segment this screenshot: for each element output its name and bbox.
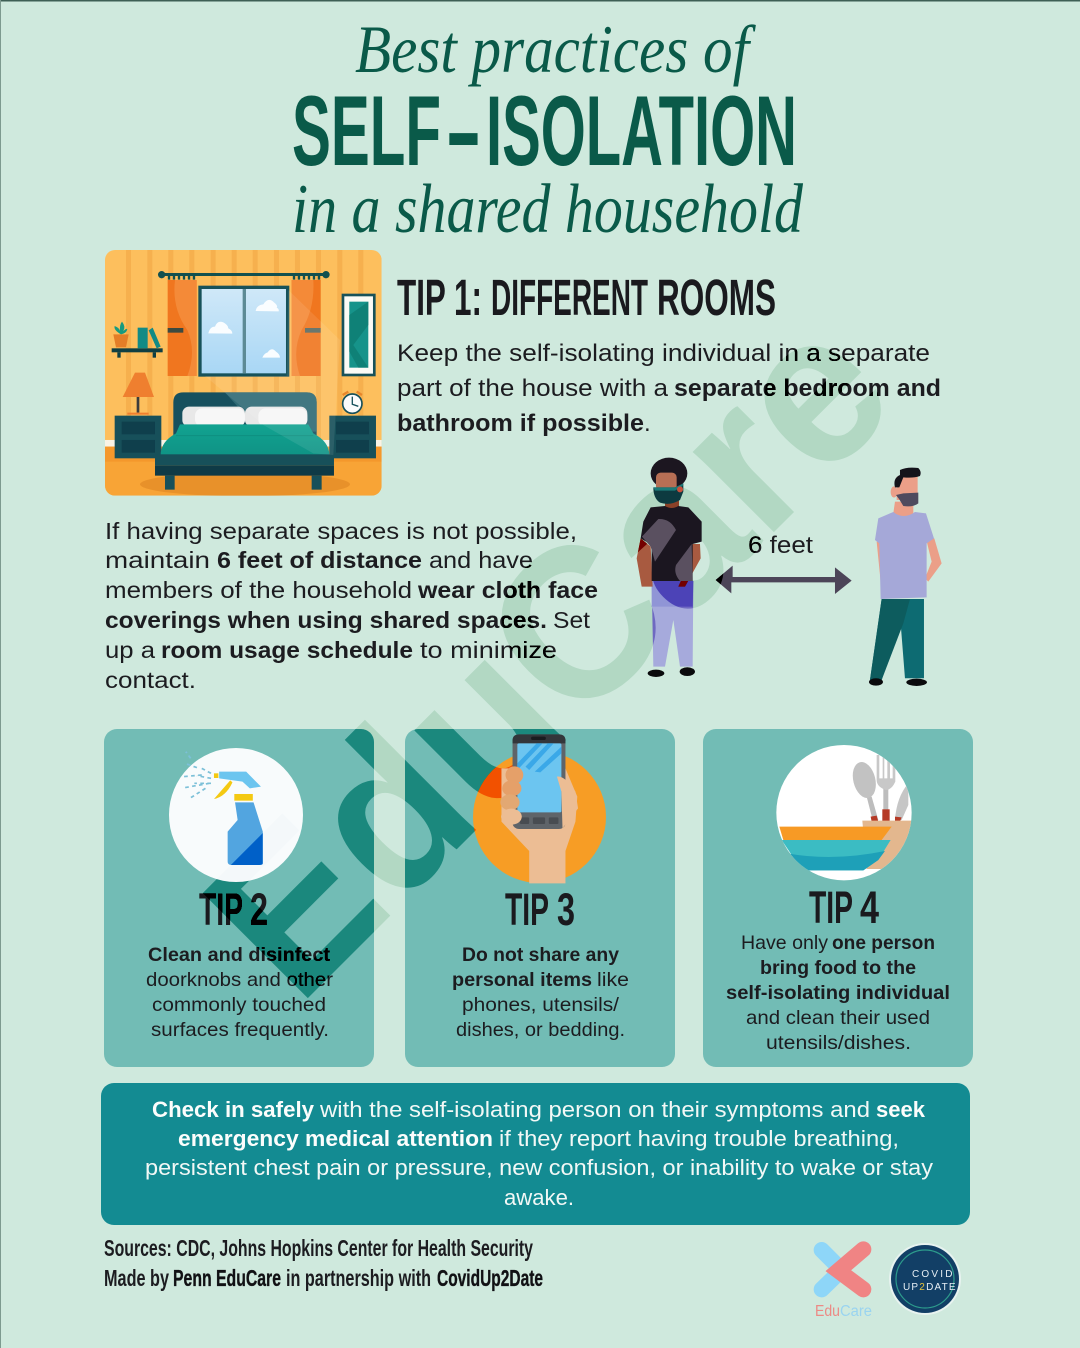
- lamp: [123, 373, 154, 397]
- title line: self-isolation: -: [445, 75, 482, 186]
- sources and credits: CovidUp2Date: [437, 1265, 543, 1291]
- text block: distance advice: coverings when using shared spaces.: [105, 607, 547, 633]
- icon: hand holding phone: [500, 734, 578, 883]
- label: 6 feet: 6 feet: [748, 532, 813, 559]
- heading: tip 1: TIP 1:: [397, 269, 482, 326]
- text block: tip 4: utensils/dishes.: [766, 1032, 911, 1054]
- text block: distance advice: to minimize: [420, 637, 557, 663]
- heading: tip 1: ROOMS: [657, 269, 776, 326]
- picture: [342, 294, 376, 376]
- person: left, torso and head: [641, 458, 702, 581]
- panel: tip 4: [703, 729, 973, 1067]
- person: right, bearded: [869, 468, 942, 686]
- title line: self-isolation: SELF: [292, 75, 441, 186]
- text block: tip 4: [726, 932, 950, 1054]
- text block: tip 2: doorknobs and other: [146, 969, 334, 991]
- window: [198, 286, 289, 377]
- logo: EduCare: Edu: [815, 1303, 840, 1320]
- callout: check in safely: emergency medical attention: [178, 1126, 493, 1151]
- light beam: [205, 290, 340, 455]
- person: left, legs and arms: [637, 538, 701, 677]
- logo: EduCare: [815, 1249, 872, 1320]
- heading: tip 4: 4: [860, 882, 879, 933]
- icon: orange circle: [473, 751, 606, 883]
- text block: tip 2: surfaces frequently.: [151, 1019, 329, 1041]
- text block: distance advice: Set: [553, 607, 590, 633]
- shelf: [112, 348, 163, 352]
- text block: tip 1 description: Keep the self-isolating individual in a separate: [397, 340, 930, 367]
- heading: tip 2: 2: [250, 884, 268, 935]
- callout: check in safely: persistent chest pain or pressure, new confusion, or inability to wake or stay: [145, 1155, 933, 1180]
- text block: tip 2: commonly touched: [152, 994, 326, 1016]
- text block: tip 2: [146, 944, 334, 1041]
- text block: tip 3: personal items: [452, 969, 592, 991]
- text block: distance advice: members of the household: [105, 577, 412, 603]
- illustration: two people six feet apart: [637, 468, 942, 686]
- text block: distance advice: room usage schedule: [161, 637, 413, 663]
- clock: [343, 392, 362, 395]
- pillows: [182, 407, 245, 427]
- text block: tip 2: Clean and disinfect: [148, 944, 331, 966]
- text block: tip 1 description: part of the house with a: [397, 375, 669, 402]
- illustration: bedroom: [105, 250, 382, 496]
- rod: [162, 273, 327, 276]
- text block: tip 1 description: bathroom if possible: [397, 410, 644, 437]
- text block: distance advice: maintain: [105, 547, 210, 573]
- text block: tip 4: and clean their used: [746, 1007, 930, 1029]
- sources and credits: Sources: CDC, Johns Hopkins Center for Health Security: [104, 1235, 533, 1261]
- text block: tip 3: dishes, or bedding.: [456, 1019, 625, 1041]
- heading: tip 4: TIP: [809, 882, 853, 933]
- sources and credits: [104, 1235, 543, 1291]
- text block: tip 4: bring food to the: [760, 957, 916, 979]
- heading: tip 2: TIP: [199, 884, 243, 935]
- logo: EduCare: Care: [840, 1303, 872, 1320]
- text block: tip 4: Have only: [741, 932, 828, 954]
- heading: tip 3: 3: [557, 884, 575, 935]
- panel: tip 2: [104, 729, 374, 1067]
- text block: distance advice: 6 feet of distance: [217, 547, 422, 573]
- text block: distance advice: and have: [429, 547, 533, 573]
- sources and credits: in partnership with: [286, 1265, 431, 1291]
- text block: tip 4: self-isolating individual: [726, 982, 950, 1004]
- title: [292, 11, 804, 248]
- watermark: EduCare: EduCare: [159, 265, 935, 1041]
- text block: tip 4: one person: [832, 932, 935, 954]
- nightstands: [115, 416, 161, 458]
- text block: tip 1 description: [397, 340, 941, 437]
- text block: distance advice: up a: [105, 637, 156, 663]
- title line: best practices of: Best practices of: [355, 11, 756, 87]
- sources and credits: Made by: [104, 1265, 169, 1291]
- logo: Covid Up2Date: [889, 1243, 961, 1315]
- heading: tip 1: DIFFERENT: [491, 269, 648, 326]
- text block: tip 3: Do not share any: [462, 944, 619, 966]
- callout: check in safely: Check in safely: [152, 1097, 315, 1122]
- text block: tip 3: like: [597, 969, 629, 991]
- text block: distance advice: [105, 518, 598, 693]
- icon: bowls and cutlery: [776, 745, 913, 880]
- headboard: [173, 392, 317, 436]
- callout: check in safely: seek: [876, 1097, 926, 1122]
- callout: check in safely: with the self-isolating person on their symptoms and: [319, 1097, 870, 1122]
- bed frame: [155, 454, 334, 466]
- logo: Covid Up2Date: COVID: [912, 1269, 955, 1280]
- heading: tip 3: TIP: [505, 884, 549, 935]
- title line: in a shared household: in a shared household: [292, 171, 804, 248]
- curtains: [168, 280, 321, 376]
- blanket: [161, 424, 329, 455]
- sources and credits: Penn EduCare: [173, 1265, 281, 1291]
- text block: tip 1 description: .: [644, 410, 651, 437]
- text block: distance advice: If having separate spaces is not possible,: [105, 518, 577, 544]
- callout: check in safely: if they report having trouble breathing,: [499, 1126, 899, 1151]
- logo: Covid Up2Date: UP2DATE: [903, 1282, 957, 1293]
- text block: tip 1 description: separate bedroom and: [674, 375, 941, 402]
- title line: self-isolation: [292, 75, 797, 186]
- callout: check in safely: awake.: [504, 1185, 574, 1210]
- text block: tip 3: [452, 944, 629, 1041]
- icon: spray bottle: [169, 748, 303, 882]
- text block: distance advice: contact.: [105, 667, 196, 693]
- double arrow: [716, 566, 852, 594]
- title line: self-isolation: ISOLATION: [486, 75, 797, 186]
- text block: tip 3: phones, utensils/: [462, 994, 620, 1016]
- text block: distance advice: wear cloth face: [417, 577, 598, 603]
- callout: check in safely: [101, 1083, 970, 1225]
- panel: tip 3: [405, 729, 675, 1067]
